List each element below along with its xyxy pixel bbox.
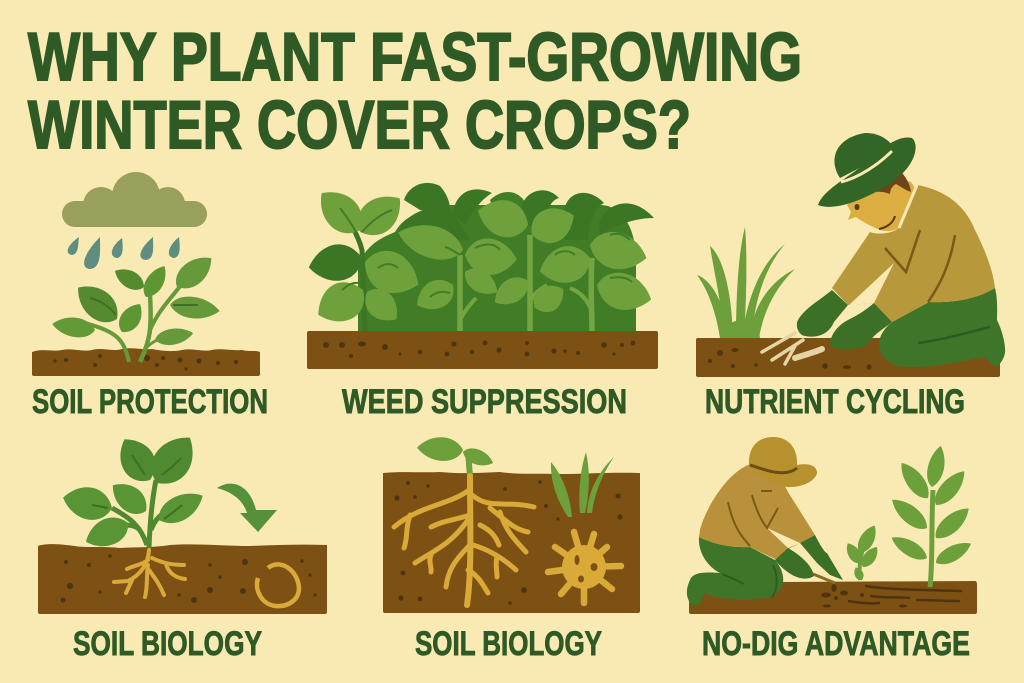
gap between arms xyxy=(767,528,800,548)
label: SOIL PROTECTION xyxy=(32,383,268,421)
title xyxy=(28,19,802,163)
soil bed xyxy=(307,331,658,369)
soil bed xyxy=(32,348,260,376)
shirt xyxy=(832,185,995,322)
arrow xyxy=(217,484,277,532)
gloves xyxy=(775,535,843,580)
soil block xyxy=(383,472,640,613)
panel: soil biology with plant xyxy=(38,427,327,663)
dense foliage xyxy=(306,181,656,332)
soil specks xyxy=(323,341,635,358)
pants xyxy=(687,537,783,606)
hat xyxy=(818,133,916,207)
soil specks xyxy=(708,348,872,370)
soil bed xyxy=(696,338,1000,377)
soil specks xyxy=(53,354,238,371)
icon: rain cloud xyxy=(62,172,207,227)
shirt xyxy=(699,465,815,560)
panel: soil biology with roots xyxy=(383,436,640,663)
plant xyxy=(60,427,209,554)
microbe ring xyxy=(257,564,299,606)
icon: soil microbe xyxy=(548,532,621,603)
label: WEED SUPPRESSION xyxy=(342,383,627,421)
label: SOIL BIOLOGY xyxy=(415,625,602,663)
trowel xyxy=(813,574,835,583)
soil clods xyxy=(821,584,907,608)
roots xyxy=(114,550,185,597)
panel: no-dig advantage xyxy=(687,437,977,663)
figure: kneeling gardener xyxy=(687,437,843,606)
soil specks xyxy=(60,554,317,603)
title: WHY PLANT FAST-GROWING xyxy=(28,19,802,95)
pants xyxy=(879,288,1005,367)
soil specks xyxy=(394,480,623,605)
label: SOIL BIOLOGY xyxy=(73,625,262,663)
panel: soil protection xyxy=(32,172,268,421)
figure: gardener xyxy=(797,133,1005,367)
grass blades xyxy=(551,452,614,517)
plant seedling xyxy=(51,249,221,362)
small seedling xyxy=(843,522,882,582)
tall plant xyxy=(887,444,975,587)
icon: rain drops xyxy=(68,237,180,269)
face and neck xyxy=(847,172,915,231)
icon: hand tool xyxy=(762,333,822,364)
gap between arms xyxy=(849,263,894,305)
sprout xyxy=(416,436,496,476)
hat xyxy=(749,437,817,487)
disturbed soil marks xyxy=(848,586,962,603)
soil bed xyxy=(689,581,977,614)
panel: weed suppression xyxy=(306,181,658,421)
roots xyxy=(394,476,534,605)
title: WINTER COVER CROPS? xyxy=(28,87,691,163)
icon: grass tuft xyxy=(697,227,795,338)
soil bed xyxy=(38,544,327,614)
gloves xyxy=(797,290,892,350)
panel: nutrient cycling xyxy=(696,133,1005,421)
